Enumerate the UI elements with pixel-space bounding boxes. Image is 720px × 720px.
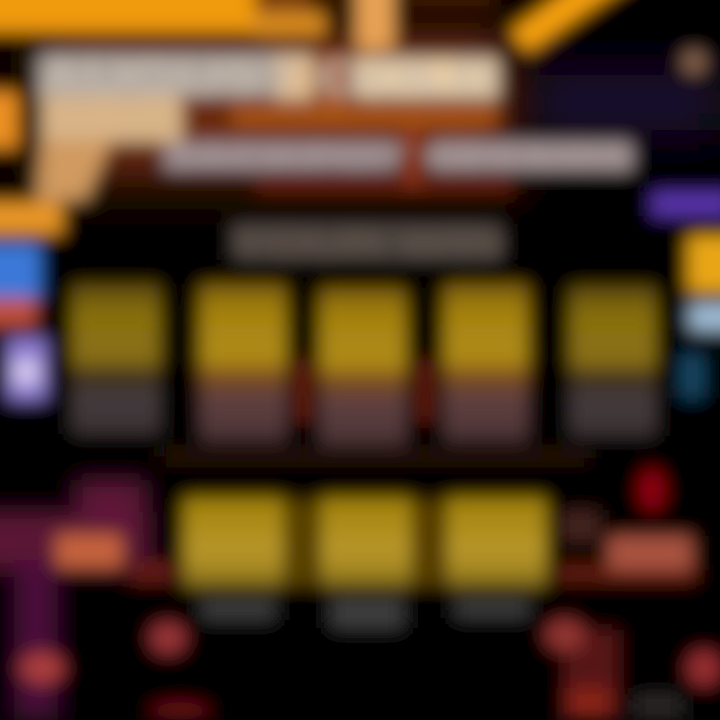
lower red lights xyxy=(20,619,720,720)
small grey text: YOUR WIN xyxy=(232,225,502,261)
reel 5 xyxy=(570,286,656,436)
lower left purple panel xyxy=(0,480,150,720)
gold button 1 xyxy=(184,498,284,620)
top lighting band xyxy=(0,0,706,234)
right side lights xyxy=(680,236,720,398)
reel 4 xyxy=(444,284,528,440)
buttons: gold row xyxy=(184,498,546,628)
headline xyxy=(36,52,632,200)
lamp xyxy=(682,50,706,74)
olive dividers between gold buttons xyxy=(289,500,439,586)
left side lights xyxy=(0,244,46,400)
reel 1 xyxy=(72,284,160,434)
reels: five columns xyxy=(72,284,656,444)
red reel dividers xyxy=(295,360,433,422)
reel 2 xyxy=(200,284,286,440)
gold button 2 xyxy=(320,498,412,628)
headline line one xyxy=(36,52,498,200)
salmon side buttons xyxy=(56,510,696,582)
headline line two: JACKPOT OFFERS xyxy=(164,139,632,175)
warm glow behind headline xyxy=(40,30,510,180)
small grey text xyxy=(232,224,502,261)
brown ledge xyxy=(160,450,590,462)
orange glow beneath first line xyxy=(232,106,498,126)
gold button 3 xyxy=(446,498,546,618)
red indicator xyxy=(639,469,665,511)
headline line one: AUGUST GOLD xyxy=(39,52,497,105)
headline line two xyxy=(164,139,632,175)
left orange glow xyxy=(0,92,18,148)
reel 3 xyxy=(320,288,406,444)
ambient purple dark tone at upper right xyxy=(530,75,720,130)
upper right purple glow xyxy=(652,192,720,216)
